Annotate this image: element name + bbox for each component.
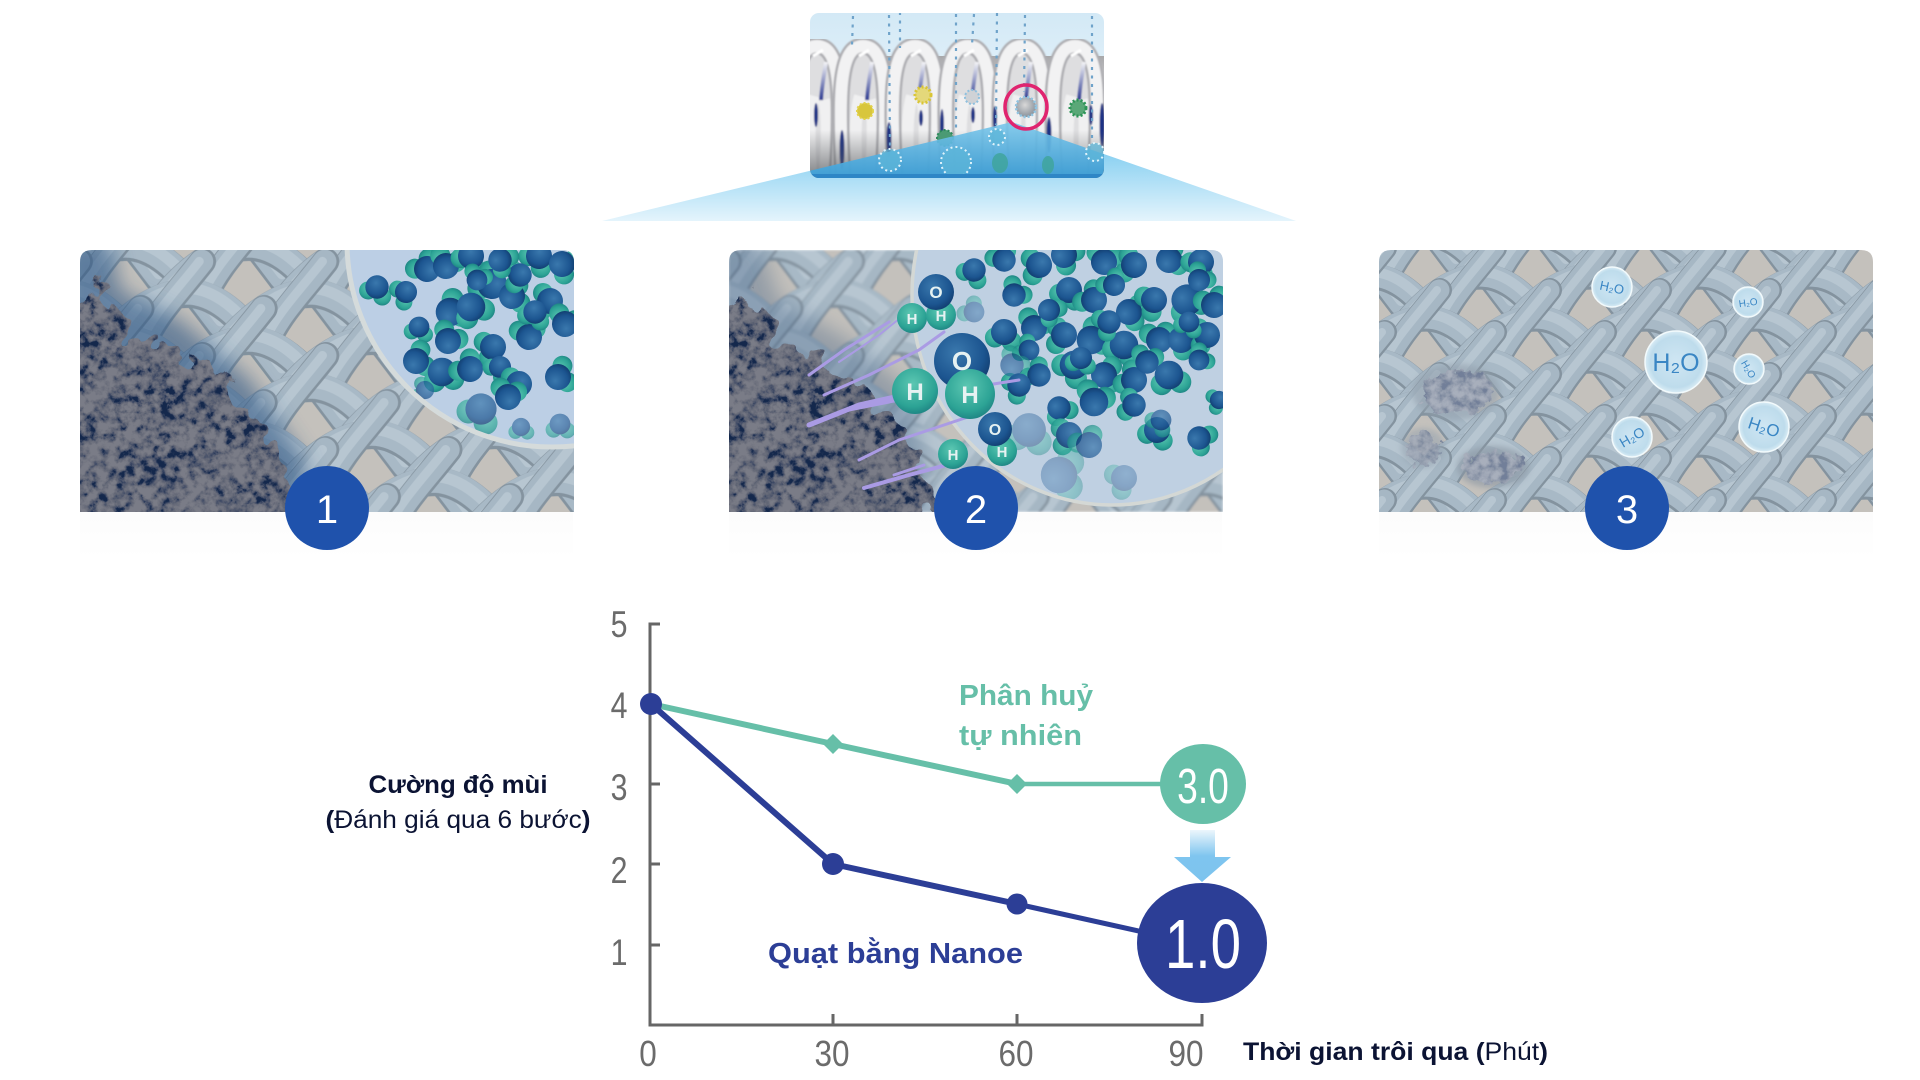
label: natural decomposition: Phân huỷ: [959, 680, 1093, 712]
H2O labels: H₂O: [1617, 423, 1648, 451]
x axis numbers: 60: [998, 1034, 1034, 1075]
panel 2: hydroxyl radicals attack the smoke: [729, 250, 1223, 550]
badge 1: 1: [316, 488, 338, 532]
large hydroxyl molecules: H: [961, 382, 979, 409]
faint reflection below panels: [80, 511, 1873, 559]
value bubble 1.0: 1.0: [1165, 906, 1241, 984]
light blue fan below image: [602, 122, 1296, 221]
image 3: [1379, 250, 1873, 512]
label: natural decomposition: tự nhiên: [959, 720, 1082, 752]
H2O labels: H₂O: [1598, 278, 1625, 297]
H2O labels: [1598, 278, 1782, 451]
large hydroxyl molecules: O: [952, 346, 972, 376]
dotted descent lines: [852, 12, 1092, 150]
large hydroxyl molecules: H: [906, 379, 924, 406]
axes: [650, 624, 1202, 1025]
large hydroxyl molecules: H: [907, 311, 917, 328]
x axis numbers: 90: [1168, 1034, 1204, 1075]
label: natural decomposition: [959, 680, 1093, 752]
line chart: odour intensity over time: [326, 604, 1548, 1075]
badge 1: [285, 466, 369, 550]
value bubble 1.0: [1137, 883, 1267, 1003]
panel 3: smoke decomposed into water: [1379, 250, 1873, 550]
pink highlight ring: [1005, 85, 1047, 129]
H2O labels: H₂O: [1746, 413, 1782, 441]
panel 1: odour molecules approach the smoke: [80, 250, 574, 550]
water bubbles: [1592, 267, 1789, 457]
y axis numbers: 5: [611, 604, 627, 646]
large hydroxyl molecules: H: [936, 308, 946, 325]
large hydroxyl molecules: H: [997, 444, 1007, 461]
image 1: [80, 250, 574, 512]
water droplets: [879, 129, 1104, 177]
virus in ring: [1016, 97, 1036, 117]
large hydroxyl molecules: O: [929, 283, 943, 302]
large hydroxyl molecules: O: [989, 422, 1001, 439]
badge 3: [1585, 466, 1669, 550]
badge 3: 3: [1616, 488, 1638, 532]
image 2: [729, 250, 1223, 512]
natural decomposition series: [651, 704, 1203, 794]
y axis numbers: 3: [611, 767, 627, 809]
navy gaps between fibres: [814, 103, 1104, 170]
down arrow: [1174, 830, 1231, 882]
x axis numbers: [639, 1034, 1204, 1075]
y axis title: [326, 771, 590, 834]
x axis numbers: 30: [814, 1034, 850, 1075]
H2O labels: H₂O: [1738, 359, 1757, 381]
label: nanoe fan: Quạt bằng Nanoe: [768, 936, 1023, 970]
H2O labels: H₂O: [1652, 349, 1700, 377]
y axis numbers: 2: [611, 850, 627, 892]
y axis title: (Đánh giá qua 6 bước ): [326, 806, 590, 834]
blue fan overlay inside image: [810, 122, 1104, 178]
value bubble 3.0: [1160, 744, 1246, 824]
y axis numbers: 1: [611, 932, 627, 974]
y axis numbers: [611, 604, 627, 974]
fabric image: [810, 13, 1104, 178]
purple discharge sparks: [809, 315, 1019, 488]
x axis numbers: 0: [639, 1034, 657, 1075]
badge 2: 2: [965, 488, 987, 532]
nanoe series: [640, 693, 1202, 945]
large hydroxyl molecules: H: [948, 447, 958, 464]
large hydroxyl molecules: [892, 274, 1017, 469]
badge 2: [934, 466, 1018, 550]
yellow and green particles: [857, 87, 1086, 146]
residual smudges: [1401, 364, 1529, 488]
lens with molecules: [910, 250, 1223, 507]
y axis numbers: 4: [611, 685, 627, 727]
y axis title: Cường độ mùi: [368, 771, 548, 799]
x axis title: Thời gian trôi qua ( Phút): [1243, 1038, 1548, 1066]
value bubble 3.0: 3.0: [1177, 760, 1229, 814]
top illustration: fabric fibres close-up: [602, 12, 1296, 221]
H2O labels: H₂O: [1738, 297, 1759, 310]
lens with molecules: [344, 250, 574, 450]
